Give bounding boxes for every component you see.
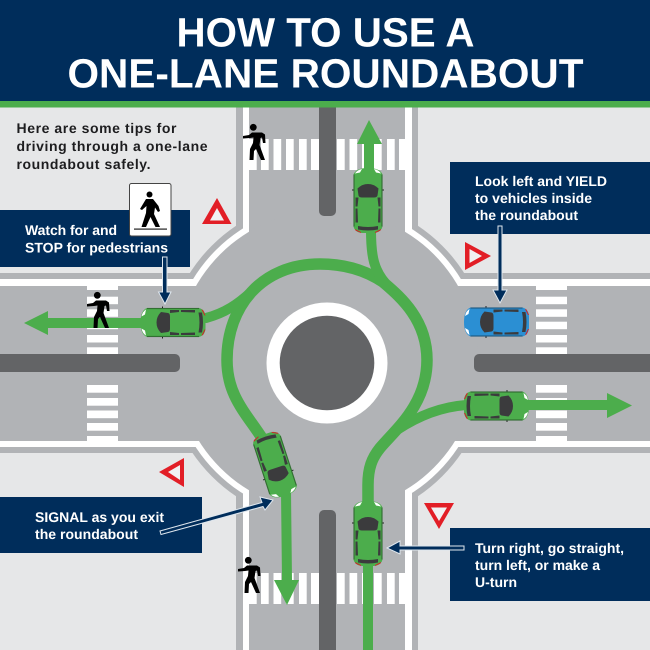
callout: signal as you exit: the roundabout <box>35 526 138 542</box>
callout: look left and yield: Look left and YIELD <box>475 173 607 189</box>
callout: look left and yield <box>450 162 650 234</box>
yield sign: southwest <box>159 458 184 487</box>
green arrow: north exit <box>357 120 382 172</box>
yield sign: southeast <box>424 503 454 529</box>
yield sign: northeast <box>465 242 491 270</box>
pedestrian crossing sign <box>130 184 171 236</box>
car: signalling exit <box>250 429 300 501</box>
car: west exit <box>140 306 206 338</box>
car: east exit <box>464 390 529 422</box>
callout: look left and yield: to vehicles inside <box>475 190 592 206</box>
crosswalk: east <box>536 286 567 441</box>
car: north exit <box>352 168 384 233</box>
crosswalk: west <box>87 286 118 441</box>
pedestrian: north crosswalk <box>243 124 266 160</box>
header banner <box>0 0 650 108</box>
callout: signal as you exit: SIGNAL as you exit <box>35 509 164 525</box>
callout: turn options: turn left, or make a <box>475 557 600 573</box>
intro text: Here are some tips for <box>16 120 177 136</box>
green arrow: east exit <box>526 393 632 418</box>
arrow: to blue car <box>493 226 507 303</box>
crosswalk: south <box>249 573 405 604</box>
arrow: to south car <box>387 541 464 554</box>
callout: turn options: Turn right, go straight, <box>475 540 624 556</box>
green arrow: south exit <box>274 492 299 605</box>
title <box>68 10 584 96</box>
car: south approach <box>352 501 384 566</box>
central island <box>266 302 388 424</box>
car: yielding blue <box>464 306 529 338</box>
intro text: driving through a one-lane <box>16 138 208 154</box>
pedestrian: west crosswalk <box>87 292 110 328</box>
green arrow: west exit <box>24 311 142 335</box>
callout: watch for pedestrians: STOP for pedestrians <box>25 240 168 256</box>
green driving paths <box>206 230 466 505</box>
callout: turn options <box>450 528 650 601</box>
intro text <box>16 120 208 172</box>
pedestrian: south crosswalk <box>238 557 260 593</box>
intro text: roundabout safely. <box>16 156 150 172</box>
crosswalk: north <box>249 139 405 170</box>
callout: watch for pedestrians: Watch for and <box>25 222 117 238</box>
callout: watch for pedestrians <box>0 210 190 267</box>
callout: look left and yield: the roundabout <box>475 207 578 223</box>
arrow: to signalling car <box>160 497 273 534</box>
callout: signal as you exit <box>0 497 202 553</box>
yield sign: northwest <box>202 198 232 224</box>
green path: south approach <box>363 562 373 650</box>
title: ONE-LANE ROUNDABOUT <box>68 50 584 96</box>
callout: turn options: U-turn <box>475 574 517 590</box>
title: HOW TO USE A <box>176 10 474 56</box>
arrow: to west car <box>158 257 171 304</box>
